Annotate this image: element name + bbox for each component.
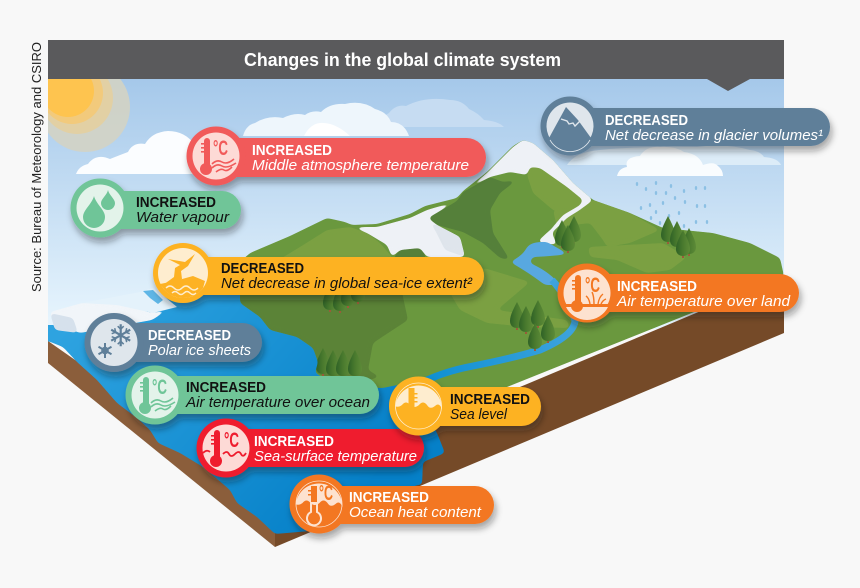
- callout: middle atmosphere temperature: [186, 126, 486, 186]
- label: Ocean heat content: [349, 504, 482, 521]
- badge shape: [84, 313, 262, 372]
- badge shape: [558, 264, 799, 322]
- polar ice: [50, 288, 177, 333]
- badge shape: [196, 418, 424, 478]
- icon: thermometer with air: °C: [152, 376, 167, 399]
- label: [616, 279, 791, 310]
- label: Polar ice sheets: [148, 342, 251, 359]
- soil: block side faces: [48, 276, 784, 547]
- icon: thermometer with waves: [202, 424, 250, 472]
- icon: sea level gauge: [395, 383, 442, 429]
- label: [185, 380, 370, 411]
- lake and river: [413, 242, 575, 387]
- label: Net decrease in glacier volumes¹: [605, 127, 823, 144]
- icon: thermometer in ocean: °C: [319, 482, 333, 505]
- label: INCREASED: [450, 392, 530, 408]
- callout: air temperature over land: [558, 264, 799, 322]
- label: Water vapour: [136, 209, 230, 226]
- icon: thermometer with grass: [564, 270, 610, 320]
- hills and mountain faces: [240, 167, 687, 385]
- label: INCREASED: [349, 490, 429, 506]
- badge shape: [126, 366, 379, 424]
- label: [148, 328, 251, 359]
- label: DECREASED: [605, 113, 688, 129]
- label: [254, 434, 417, 465]
- label: Middle atmosphere temperature: [252, 157, 469, 174]
- badge shape: [153, 243, 484, 303]
- trees: [316, 216, 696, 378]
- callout: polar ice sheets: [84, 313, 262, 372]
- icon: thermometer with grass: °C: [585, 274, 600, 297]
- label: Net decrease in global sea-ice extent²: [221, 275, 473, 292]
- label: INCREASED: [252, 143, 332, 159]
- callout: sea-ice extent: [153, 243, 484, 303]
- icon: thermometer with air: °C: [213, 137, 228, 160]
- icon: thermometer in ocean: [296, 481, 342, 527]
- label: [252, 143, 469, 174]
- label: Sea level: [450, 406, 508, 423]
- callout: water vapour: [70, 178, 241, 238]
- rain: [636, 181, 708, 229]
- icon: thermometer with air: [132, 372, 178, 418]
- badge shape: [540, 96, 830, 156]
- mountain snow: [352, 140, 593, 257]
- sun: [48, 79, 130, 152]
- sky: [48, 79, 784, 329]
- title: Changes in the global climate system: [244, 50, 561, 70]
- callout: sea level: [389, 376, 541, 436]
- callout: glacier volumes: [540, 96, 830, 156]
- label: DECREASED: [148, 328, 231, 344]
- badge shape: [290, 474, 494, 534]
- callout: sea-surface temperature: [196, 418, 424, 478]
- badge shape: [70, 178, 241, 238]
- icon: mountain: [546, 102, 594, 152]
- icon: water drops: [76, 184, 124, 232]
- ocean: [30, 285, 445, 534]
- land: [215, 140, 784, 415]
- clouds: [76, 99, 781, 176]
- header bar: [48, 40, 784, 91]
- label: [450, 392, 530, 423]
- label: [136, 195, 230, 226]
- label: INCREASED: [617, 279, 697, 295]
- label: INCREASED: [186, 380, 266, 396]
- label: Air temperature over ocean: [185, 394, 370, 411]
- icon: snowflakes: [90, 319, 138, 366]
- icon: thermometer with waves: °C: [224, 429, 239, 452]
- icon: cracked sea ice: [158, 248, 208, 298]
- label: Sea-surface temperature: [254, 448, 417, 465]
- callout: air temperature over ocean: [126, 366, 379, 424]
- label: [605, 113, 823, 144]
- label: Air temperature over land: [616, 293, 791, 310]
- label: INCREASED: [136, 195, 216, 211]
- icon: thermometer with air: [192, 132, 240, 180]
- badge shape: [186, 126, 486, 186]
- label: [221, 261, 473, 292]
- callout: ocean heat content: [290, 474, 494, 534]
- label: DECREASED: [221, 261, 304, 277]
- label: INCREASED: [254, 434, 334, 450]
- label: [349, 490, 482, 521]
- badge shape: [389, 376, 541, 436]
- source: Source: Bureau of Meteorology and CSIRO: [29, 42, 44, 292]
